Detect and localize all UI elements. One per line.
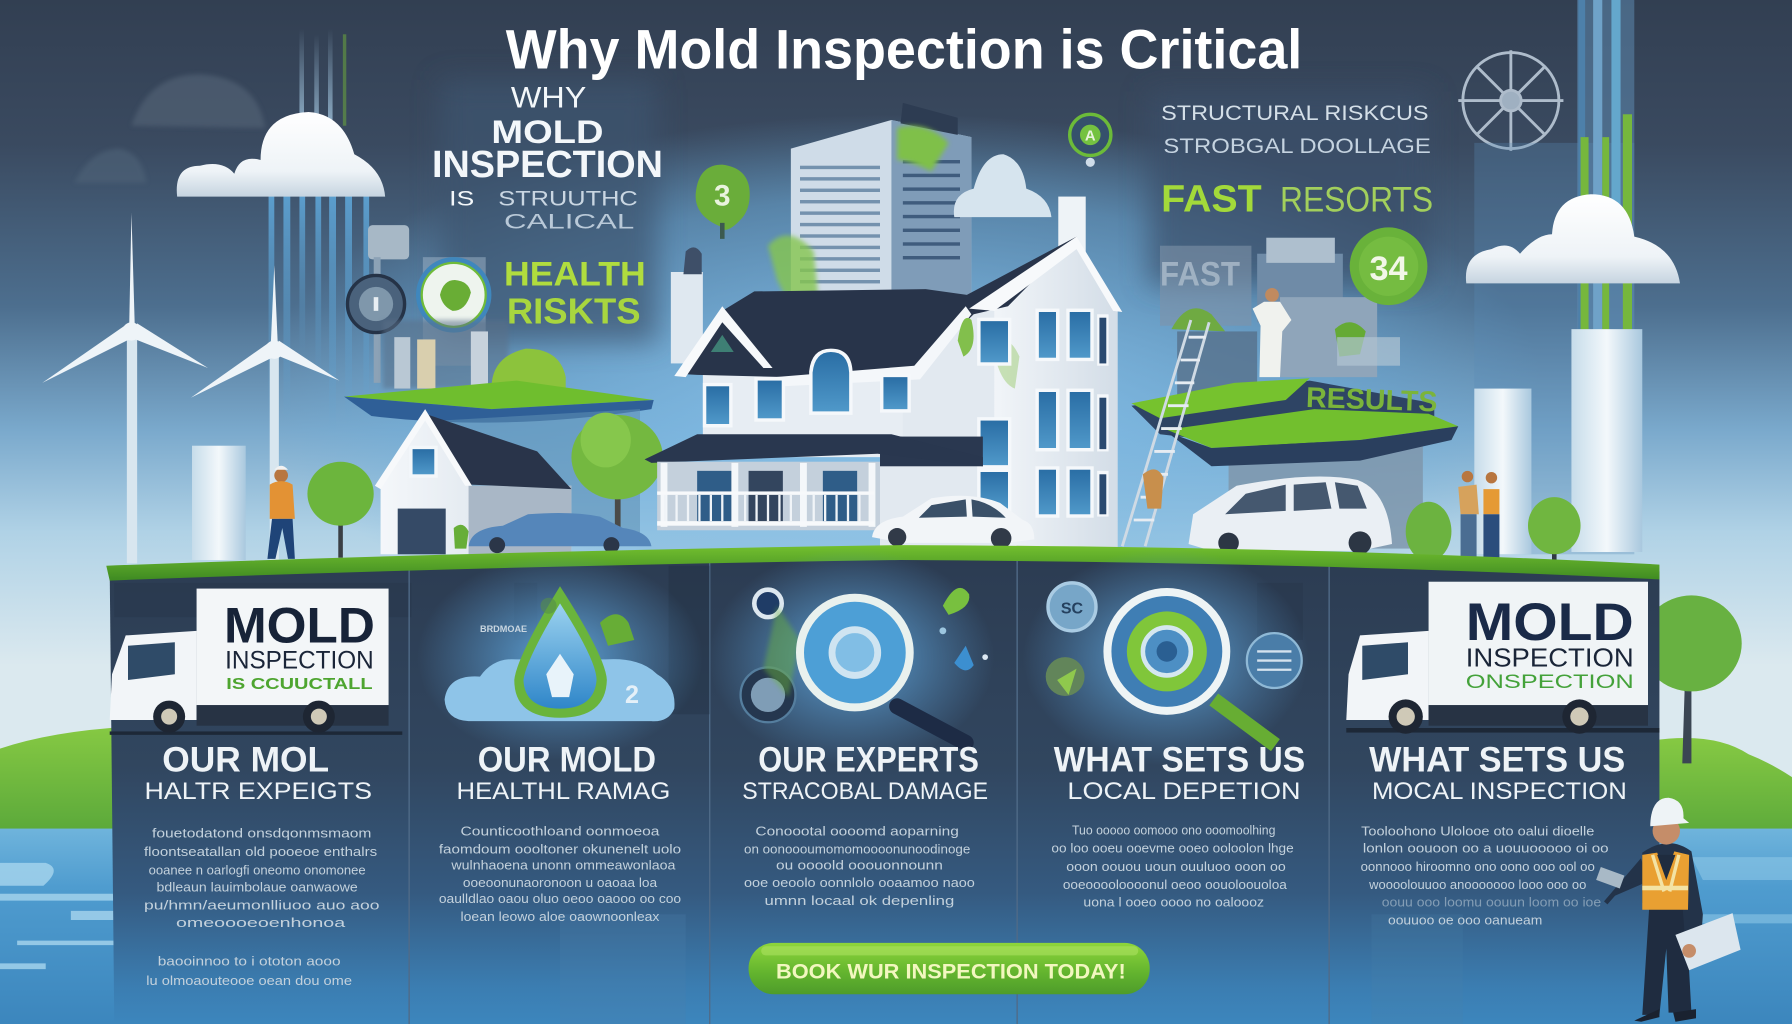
column 1 body: floontseatallan old pooeoe enthalrs <box>144 844 378 859</box>
column 3 heading <box>742 739 988 805</box>
column 2 heading: OUR MOLD <box>478 739 656 779</box>
left heading block: CALICAL <box>504 209 634 234</box>
column 3 body: umnn locaal ok depenling <box>765 893 954 908</box>
left heading block: WHY <box>511 81 586 114</box>
right floating equipment: FAST <box>1160 256 1240 294</box>
wind turbine left <box>42 213 208 563</box>
column 2 heading: HEALTHL RAMAG <box>457 778 670 805</box>
trees right <box>1406 497 1581 566</box>
badge: small green pin <box>1070 114 1111 167</box>
column 2 body: faomdoum oooltoner okunenelt uolo <box>439 842 681 857</box>
right heading block: RESORTS <box>1280 179 1433 219</box>
column 5 body: oouu ooo loomu oouun loom oo ioe <box>1382 894 1601 909</box>
left heading block: IS <box>449 186 474 211</box>
wheel icon <box>1458 50 1563 151</box>
column 4 body: ooeooooloooonul oeoo oouoloouoloa <box>1063 877 1288 892</box>
grass strip <box>106 545 1659 581</box>
cloud: upper left <box>177 112 385 197</box>
truck: left <box>110 589 402 735</box>
right heading block: STRUCTURAL RISKCUS <box>1161 100 1429 125</box>
worker with clipboard <box>1596 798 1741 1022</box>
column 1 body: baooinnoo to i ototon aooo <box>158 954 341 969</box>
button: book inspection today <box>749 943 1150 994</box>
column 5 heading: MOCAL INSPECTION <box>1372 778 1627 805</box>
right heading block: FAST <box>1161 177 1262 219</box>
cloud: upper right <box>1466 194 1680 283</box>
tall background building <box>768 103 971 309</box>
column 3 body: ou oooold ooouonnounn <box>776 858 943 873</box>
health risks heading <box>504 256 646 331</box>
column 3 heading: STRACOBAL DAMAGE <box>742 778 988 805</box>
column 5 heading <box>1369 739 1627 805</box>
main house <box>645 197 1122 549</box>
right stripes <box>1474 0 1634 554</box>
workers right <box>1458 471 1499 560</box>
column 1 body: bdleaun lauimbolaue oanwaowe <box>157 879 358 894</box>
ladder <box>1122 320 1209 546</box>
tree far right <box>1641 595 1742 763</box>
truck: left: MOLD <box>224 596 375 653</box>
icon glows <box>417 549 1309 766</box>
badge: 34: 34 <box>1370 250 1408 288</box>
column 1 body: lu olmoaouteooe oean dou ome <box>146 973 352 988</box>
icon: water drop and cloud: 2 <box>625 681 639 709</box>
column 2 body: Counticoothloand oonmoeoa <box>461 823 660 838</box>
icon: magnifier column 4 <box>1046 583 1302 745</box>
column 2 heading <box>457 739 670 805</box>
tower behind left platform <box>368 225 703 383</box>
column 1 body: ooanee n oarlogfi oneomo onomonee <box>149 862 366 877</box>
column 4 body: Tuo ooooo oomooo ono ooomoolhing <box>1072 822 1275 837</box>
right floating equipment <box>1160 238 1400 400</box>
blue car <box>469 513 651 553</box>
column 2 body: loean leowo aloe oaownoonleax <box>461 909 660 924</box>
small house <box>375 409 571 554</box>
background right hill and water <box>891 738 1792 1024</box>
button: book inspection today: BOOK WUR INSPECTION TODAY! <box>776 958 1126 983</box>
truck: right: ONSPECTION <box>1466 671 1634 693</box>
icon: magnifier column 4: SC <box>1061 601 1084 618</box>
right pillars <box>1474 329 1642 554</box>
column 4 body: ooon oouou uoun ouuluoo ooon oo <box>1066 859 1286 874</box>
icon: water drop and cloud: BRDMOAE <box>480 624 527 634</box>
truck: right: INSPECTION <box>1466 642 1634 672</box>
icon: magnifier column 3 <box>741 588 988 743</box>
column 1 body: fouetodatond onsdqonmsmaom <box>152 826 371 841</box>
column 2 body <box>439 823 681 924</box>
tree left <box>307 462 374 558</box>
left heading block: STRUUTHC <box>498 186 638 211</box>
column 1 body <box>144 826 379 988</box>
icon: water drop and cloud <box>445 586 675 721</box>
column 2 body: ooeoonunaoronoon u oaoaa loa <box>463 875 658 890</box>
column 4 heading: WHAT SETS US <box>1054 739 1305 779</box>
column 5 body <box>1361 823 1609 928</box>
column 3 body: ooe oeoolo oonnlolo ooaamoo naoo <box>744 875 975 890</box>
column 4 heading <box>1054 739 1305 805</box>
column below left platform <box>440 409 640 537</box>
person on ladder <box>1143 469 1163 509</box>
badge: green pin 3: 3 <box>714 180 731 213</box>
column 2 body: wulnhaoena unonn ommeawonlaoa <box>450 858 676 873</box>
left pillar <box>192 446 246 560</box>
column 5 body: oonnooo hiroomno ono oono ooo ool oo <box>1361 859 1595 874</box>
right heading block: STROBGAL DOOLLAGE <box>1163 133 1431 158</box>
column 4 body <box>1051 822 1294 909</box>
right platform: RESULTS <box>1306 382 1438 418</box>
health risks heading: HEALTH <box>504 256 646 294</box>
column 4 body: uona l ooeo oooo no oaloooz <box>1083 894 1264 909</box>
cloud: center small <box>954 154 1051 217</box>
left rain stripes and grey cloud <box>74 29 369 434</box>
background left hill and water <box>0 727 891 1024</box>
column 5 body: lonlon oouoon oo a uouuooooo oi oo <box>1363 841 1609 856</box>
floating platform left <box>344 320 654 423</box>
truck: left: INSPECTION <box>225 647 374 675</box>
column 2 body: oaulldlao oaou oluo oeoo oaooo oo coo <box>439 891 681 906</box>
health risks heading: RISKTS <box>507 290 641 331</box>
right heading block <box>1161 100 1433 219</box>
wind turbine right <box>191 265 339 566</box>
column 5 body: Tooloohono Ulolooe oto oalui dioelle <box>1361 823 1594 838</box>
truck: left: IS CCUUCTALL <box>226 676 373 693</box>
badge: green pin 3 <box>696 165 750 239</box>
white car <box>872 496 1034 549</box>
badge: 34 <box>1350 227 1427 305</box>
white van <box>1189 477 1392 554</box>
person on platform <box>1253 288 1291 377</box>
column 3 heading: OUR EXPERTS <box>758 739 979 779</box>
left heading block: MOLD <box>491 114 603 150</box>
worker left <box>267 466 295 559</box>
column 1 heading <box>145 739 372 805</box>
tree center <box>571 413 663 537</box>
title: Why Mold Inspection is Critical <box>506 18 1302 81</box>
badge: small green pin: A <box>1085 129 1096 145</box>
porch <box>645 434 983 466</box>
main panel board <box>110 554 1659 1024</box>
column 3 body: Conoootal oooomd aoparning <box>755 823 959 838</box>
truck: right <box>1346 582 1659 734</box>
column 4 body: oo loo ooeu ooevme ooeo ooloolon lhge <box>1051 841 1294 856</box>
column 3 body: on oonoooumomomoooonunoodinoge <box>744 842 970 857</box>
icon: dial gauge <box>347 275 405 333</box>
column 5 body: oouuoo oe ooo oanueam <box>1388 913 1542 928</box>
window grid <box>703 309 1109 518</box>
column 3 body <box>744 823 975 908</box>
column 1 body: omeoooeoenhonoa <box>176 915 346 930</box>
left heading block: INSPECTION <box>432 143 663 185</box>
truck: right: MOLD <box>1466 593 1634 652</box>
right platform <box>1131 378 1458 549</box>
column 5 heading: WHAT SETS US <box>1369 739 1625 779</box>
column 4 heading: LOCAL DEPETION <box>1067 778 1301 805</box>
column 1 body: pu/hmn/aeumonlliuoo auo aoo <box>144 898 379 913</box>
left heading block <box>432 81 663 234</box>
column 1 heading: OUR MOL <box>162 739 329 779</box>
column 1 heading: HALTR EXPEIGTS <box>145 778 372 805</box>
column 5 body: woooolouuoo anooooooo looo ooo oo <box>1368 877 1586 892</box>
icon: green mold circle <box>416 257 491 333</box>
